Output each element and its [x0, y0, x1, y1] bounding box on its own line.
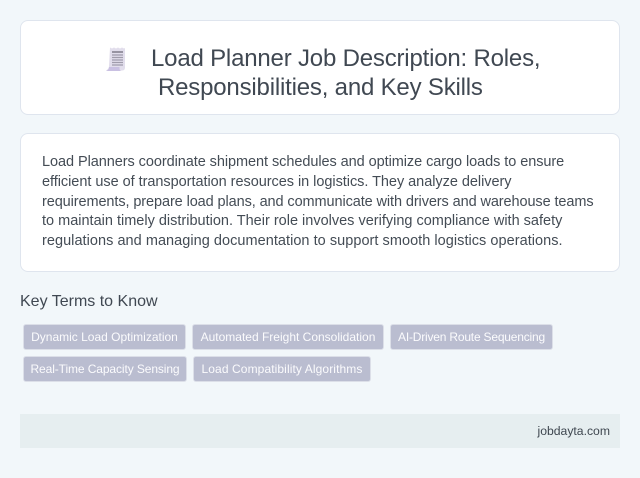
title line 1: Load Planner Job Description: Roles,: [151, 45, 540, 72]
footer source text: jobdayta.com: [538, 424, 610, 438]
heading: key terms: Key Terms to Know: [20, 293, 158, 310]
tag: automated freight consolidation: Automated Freight Consolidation: [201, 330, 375, 344]
title line 2: Responsibilities, and Key Skills: [158, 74, 483, 101]
description text: [42, 154, 594, 249]
description text: efficient use of transportation resources in logistics. They analyze delivery: [42, 174, 512, 190]
tag: load compatibility algorithms: Load Compatibility Algorithms: [202, 362, 362, 376]
description text: requirements, prepare load plans, and communicate with drivers and warehouse teams: [42, 194, 593, 210]
tag: automated freight consolidation: [192, 324, 384, 350]
tag: dynamic load optimization: [23, 324, 186, 350]
tag: real-time capacity sensing: [23, 356, 187, 382]
panel: description card: [20, 133, 620, 272]
tag: load compatibility algorithms: [193, 356, 371, 382]
tag: ai-driven route sequencing: AI-Driven Route Sequencing: [398, 330, 545, 344]
tag: ai-driven route sequencing: [390, 324, 553, 350]
footer bar: [20, 414, 620, 448]
icon: document scroll: [106, 48, 125, 71]
description text: to maintain timely distribution. Their role involves verifying compliance with safety: [42, 213, 562, 229]
description text: regulations and managing documentation to support smooth logistics operations.: [42, 233, 563, 249]
description text: Load Planners coordinate shipment schedules and optimize cargo loads to ensure: [42, 154, 564, 170]
panel: title card: [20, 20, 620, 115]
tag: dynamic load optimization: Dynamic Load Optimization: [31, 330, 178, 344]
tag: real-time capacity sensing: Real-Time Capacity Sensing: [30, 362, 180, 376]
